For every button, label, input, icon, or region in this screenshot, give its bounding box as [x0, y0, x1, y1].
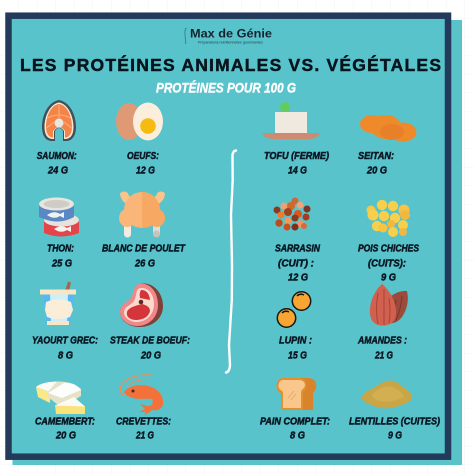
item: sarrasin: 12 G — [288, 272, 308, 284]
item: pois chiches: POIS CHICHES — [358, 244, 419, 254]
item: saumon: 24 G — [47, 166, 68, 176]
icon: lupin beans — [277, 292, 311, 327]
item: yaourt grec: 8 G — [58, 350, 73, 362]
item: camembert: CAMEMBERT: — [35, 416, 95, 428]
item: blanc de poulet: BLANC DE POULET — [102, 244, 186, 254]
icon: tuna cans — [39, 198, 79, 236]
item: seitan: SEITAN: — [358, 151, 394, 162]
icon: roast chicken — [119, 192, 165, 238]
item: blanc de poulet — [102, 192, 186, 270]
item: pois chiches: (CUITS): — [368, 258, 406, 270]
icon: lentil pile — [362, 381, 412, 408]
item: tofu: TOFU (FERME) — [264, 151, 330, 162]
item: yaourt grec: YAOURT GREC: — [32, 336, 98, 346]
subtitle: PROTÉINES POUR 100 G — [156, 80, 296, 96]
item: pain complet: PAIN COMPLET: — [260, 416, 330, 428]
item: oeufs — [116, 102, 163, 176]
item: thon: THON: — [47, 244, 74, 254]
logo: Max de Génie: Max de Génie — [190, 28, 272, 40]
item: steak de boeuf — [110, 284, 190, 362]
item: steak de boeuf: STEAK DE BOEUF: — [110, 336, 190, 346]
item: crevettes: CREVETTES: — [116, 416, 171, 428]
item: sarrasin: (CUIT) : — [278, 258, 314, 270]
item: pain complet: 8 G — [290, 430, 305, 442]
item: sarrasin — [274, 198, 321, 284]
item: lupin — [277, 292, 312, 362]
item: amandes: AMANDES : — [357, 336, 407, 346]
item: crevettes — [116, 375, 171, 442]
item: saumon — [37, 100, 77, 176]
item: steak de boeuf: 20 G — [140, 350, 161, 362]
item: lentilles — [349, 381, 441, 442]
item: amandes — [357, 284, 408, 362]
item: tofu: 14 G — [288, 166, 307, 176]
item: lupin: 15 G — [288, 350, 307, 362]
item: lentilles: LENTILLES (CUITES) — [349, 416, 441, 428]
title: LES PROTÉINES ANIMALES VS. VÉGÉTALES — [20, 54, 441, 75]
item: camembert: 20 G — [55, 430, 76, 442]
icon: seitan pieces — [360, 115, 416, 142]
icon: beef steak — [120, 284, 163, 327]
icon: bread slice — [276, 378, 316, 410]
item: camembert — [35, 381, 95, 442]
item: oeufs: 12 G — [136, 166, 155, 176]
icon: salmon steak — [42, 100, 76, 141]
item: amandes: 21 G — [374, 350, 393, 362]
item: blanc de poulet: 26 G — [134, 258, 155, 270]
item: pois chiches: 9 G — [381, 272, 396, 284]
logo: Max de Génie — [185, 28, 272, 44]
item: crevettes: 21 G — [135, 430, 154, 442]
item: sarrasin: SARRASIN — [275, 244, 321, 254]
icon: yogurt pot — [40, 282, 76, 325]
item: tofu — [262, 102, 330, 176]
icon: cheese wedges — [36, 381, 85, 414]
item: lentilles: 9 G — [388, 430, 402, 442]
icon: almonds — [370, 284, 408, 326]
item: yaourt grec — [32, 282, 98, 362]
icon: eggs — [116, 102, 163, 140]
item: lupin: LUPIN : — [279, 336, 312, 346]
item: saumon: SAUMON: — [37, 151, 77, 162]
item: pois chiches — [358, 200, 419, 284]
item: thon: 25 G — [51, 258, 72, 270]
icon: chickpeas — [366, 200, 410, 237]
logo: Max de Génie: Préparations nutritionnelles gourmandes — [198, 40, 263, 44]
icon: tofu on plate — [262, 102, 321, 139]
item: pain complet — [260, 378, 330, 442]
item: seitan — [358, 115, 416, 176]
item: thon — [39, 198, 79, 270]
item: oeufs: OEUFS: — [127, 151, 159, 162]
icon: buckwheat pile — [274, 198, 310, 230]
item: seitan: 20 G — [366, 166, 387, 176]
vertical divider — [226, 150, 236, 372]
icon: shrimp — [120, 375, 163, 416]
